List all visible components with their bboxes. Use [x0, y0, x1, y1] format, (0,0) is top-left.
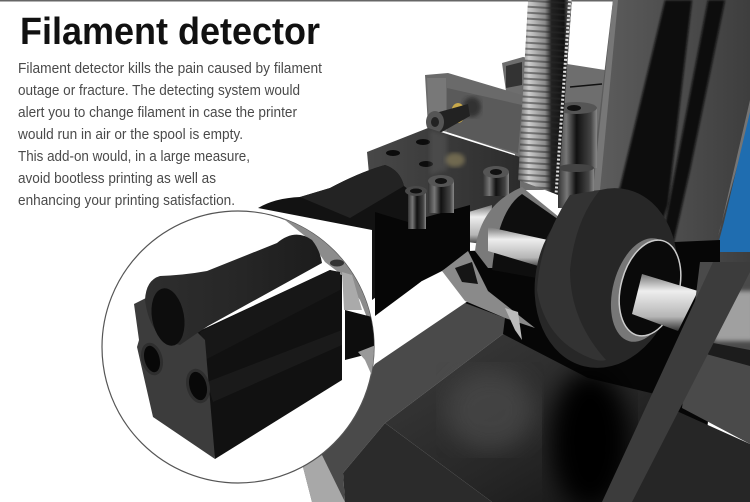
magnifier circle	[102, 211, 380, 483]
lead screw	[518, 0, 572, 195]
description text	[17, 60, 323, 209]
description text: would run in air or the spool is empty.	[17, 126, 243, 143]
printer assembly	[258, 0, 750, 502]
cone spacer	[475, 187, 565, 280]
description text: alert you to change filament in case the printer	[18, 104, 297, 121]
description text: avoid bootless printing as well as	[18, 170, 216, 187]
magnified filament detector	[134, 235, 342, 459]
bearing	[600, 231, 698, 349]
vertical bracket with bolt	[425, 73, 522, 155]
elbow part	[682, 262, 750, 444]
horizontal plate with holes	[367, 128, 520, 240]
blue frame detail	[716, 112, 750, 252]
metal bracket near wheel	[442, 251, 535, 328]
roller wheel	[516, 173, 696, 383]
lower right box	[620, 408, 750, 502]
title: Filament detector	[20, 11, 320, 53]
description text: enhancing your printing satisfaction.	[18, 192, 235, 209]
base plates	[303, 303, 680, 502]
description text: Filament detector kills the pain caused by filament	[18, 60, 323, 77]
small standoffs	[405, 166, 509, 229]
description text: This add-on would, in a large measure,	[18, 148, 250, 165]
spring	[505, 308, 522, 340]
black recess around wheel	[465, 240, 720, 502]
inset background parts	[134, 212, 380, 459]
diagonal bar	[602, 262, 750, 502]
shaft left stub	[452, 205, 492, 245]
aluminium column	[590, 0, 750, 275]
description text: outage or fracture. The detecting system would	[18, 82, 300, 99]
rear bracket	[502, 57, 605, 190]
tall standoff	[555, 102, 597, 208]
white gap under detector	[375, 281, 468, 364]
rear filament detector	[258, 165, 470, 316]
